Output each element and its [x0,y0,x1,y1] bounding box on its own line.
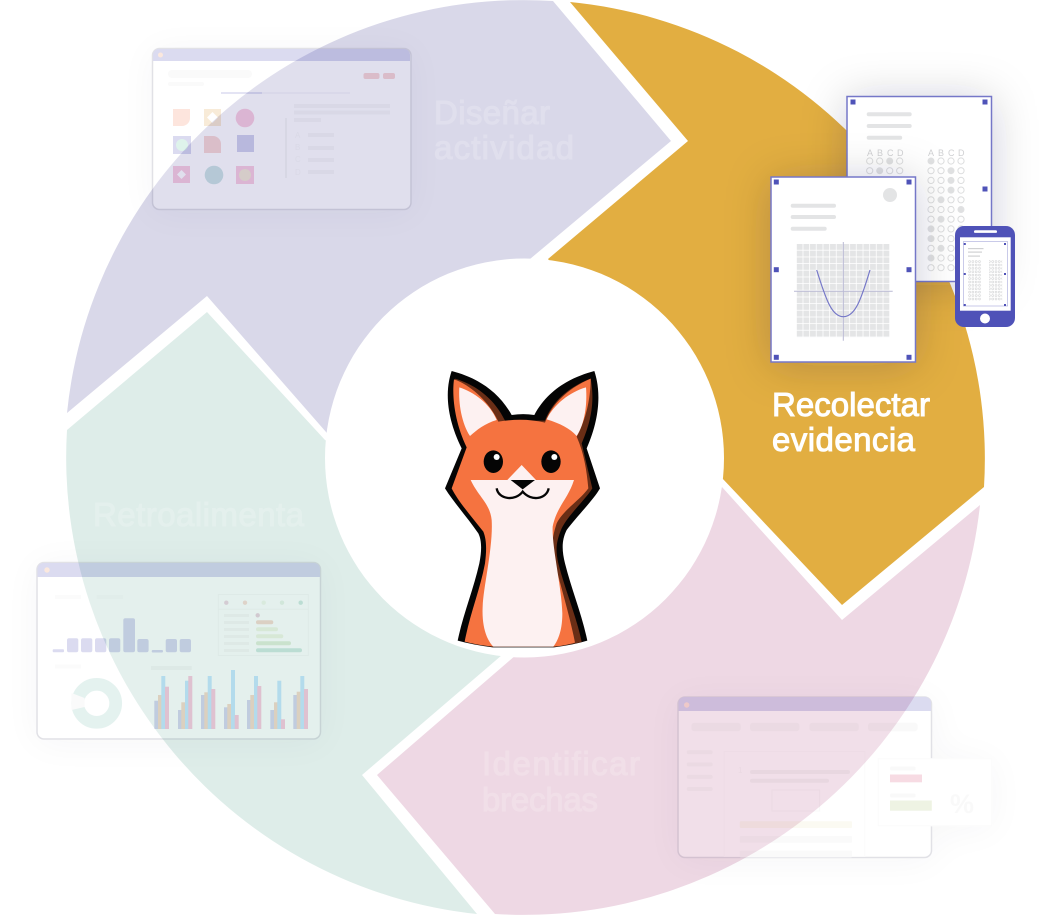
faded window: disenar actividad: B [295,143,300,152]
faded window: disenar actividad: A [295,131,301,140]
icon: fox mascot [445,371,600,647]
fox eyes [484,450,561,473]
back answer sheet: D [958,148,965,158]
back answer sheet: B [938,148,944,158]
faded window: identificar brechas: % [950,789,974,819]
back answer sheet: C [948,148,955,158]
heading: recolectar evidencia: evidencia [772,421,916,458]
faded window: identificar brechas [678,697,992,858]
left ear inner [459,387,497,436]
front graph sheet [771,177,916,362]
faded window: identificar brechas: 1 [738,766,743,775]
faded window: disenar actividad: C [295,155,301,164]
fox shadow [455,379,592,647]
back answer sheet: D [897,148,904,158]
back answer sheet: A [928,148,934,158]
fox body [452,379,591,647]
heading: recolectar evidencia: Recolectar [772,386,930,423]
back answer sheet: C [887,148,894,158]
right ear inner [547,387,586,436]
heading: identificar brechas: brechas [482,781,598,818]
heading: disenar actividad: actividad [434,129,574,166]
back answer sheet: B [877,148,883,158]
heading: recolectar evidencia [772,386,930,458]
heading: retroalimenta: Retroalimenta [93,496,305,533]
fox nose and smile [497,480,549,498]
faded window: disenar actividad: D [295,168,301,177]
icon: phone [955,226,1015,327]
back answer sheet: A [867,148,873,158]
heading: identificar brechas: Identificar [482,745,640,782]
segment: recolectar evidencia [548,2,985,605]
fox outline [445,371,600,647]
back answer sheet [847,96,992,282]
illustration: exam sheets and phone [771,96,1015,362]
faded window: disenar actividad [152,48,411,210]
segment: retroalimenta [66,312,502,914]
heading: disenar actividad [434,94,574,166]
fox belly [471,465,574,647]
center circle [325,258,724,658]
segment: disenar actividad [67,0,671,448]
segment: identificar brechas [377,487,980,915]
heading: identificar brechas [482,745,640,818]
heading: disenar actividad: Diseñar [434,94,550,131]
faded window: retroalimenta [37,562,320,739]
